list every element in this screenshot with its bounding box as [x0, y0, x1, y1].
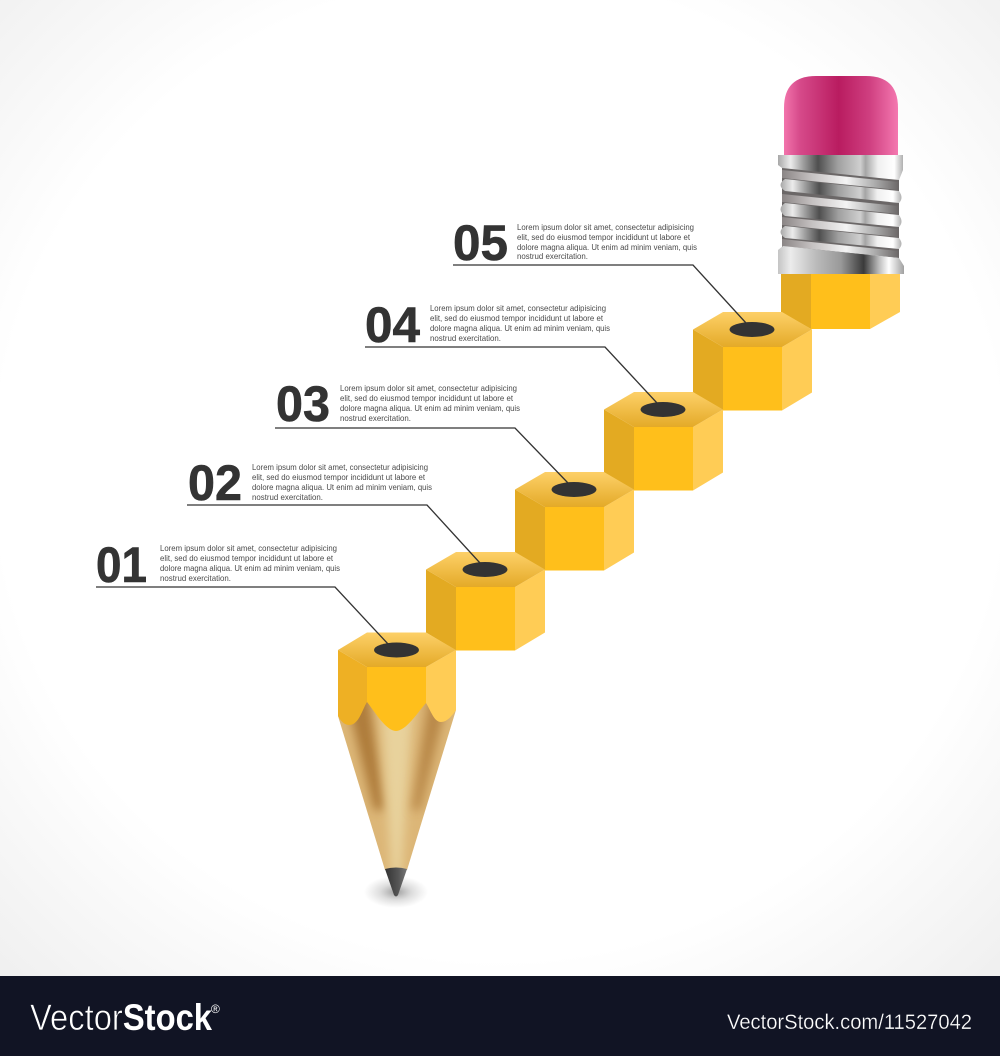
step 05 text: Lorem ipsum dolor sit amet, consectetur adipisicing: [517, 222, 694, 232]
number 03: 03: [276, 376, 330, 432]
hexagon block 2: [426, 552, 545, 650]
pink eraser: [784, 76, 898, 155]
step 01 text: dolore magna aliqua. Ut enim ad minim veniam, quis: [160, 563, 340, 573]
step 02 text: nostrud exercitation.: [252, 492, 323, 502]
step 01 text: nostrud exercitation.: [160, 573, 231, 583]
pencil eraser end: [778, 76, 904, 329]
step 03 text: nostrud exercitation.: [340, 413, 411, 423]
number 02: 02: [188, 455, 242, 511]
step 05 text: nostrud exercitation.: [517, 251, 588, 261]
step 01 callout: [96, 537, 388, 644]
leader line 03: [275, 428, 568, 483]
step 03 text: Lorem ipsum dolor sit amet, consectetur adipisicing: [340, 383, 517, 393]
leader line 02: [187, 505, 480, 563]
step 02 callout: [187, 455, 480, 563]
pencil tip: [338, 632, 456, 906]
leader line 01: [96, 587, 388, 644]
step 05 text: elit, sed do eiusmod tempor incididunt ut labore et: [517, 232, 691, 242]
step 04 text: nostrud exercitation.: [430, 333, 501, 343]
number 05: 05: [453, 215, 508, 271]
hexagon block 3: [515, 472, 634, 570]
step 04 text: dolore magna aliqua. Ut enim ad minim veniam, quis: [430, 323, 610, 333]
step 01 text: Lorem ipsum dolor sit amet, consectetur adipisicing: [160, 543, 337, 553]
step 03 text: elit, sed do eiusmod tempor incididunt ut labore et: [340, 393, 514, 403]
metal ferrule: [778, 155, 904, 274]
step 04 callout: [365, 297, 657, 403]
leader line 05: [453, 265, 746, 323]
registered mark: ®: [211, 1002, 220, 1016]
step 04 text: elit, sed do eiusmod tempor incididunt ut labore et: [430, 313, 604, 323]
step 04 text: Lorem ipsum dolor sit amet, consectetur adipisicing: [430, 303, 606, 313]
footer bar: [0, 976, 1000, 1056]
graphite lead: [385, 868, 407, 896]
step 02 text: Lorem ipsum dolor sit amet, consectetur adipisicing: [252, 462, 428, 472]
step 03 text: dolore magna aliqua. Ut enim ad minim veniam, quis: [340, 403, 520, 413]
number 01: 01: [96, 537, 147, 593]
number 04: 04: [365, 297, 420, 353]
step 02 text: elit, sed do eiusmod tempor incididunt ut labore et: [252, 472, 426, 482]
step 03 callout: [275, 376, 568, 483]
step 05 callout: [453, 215, 746, 323]
hexagon block 1 with scalloped edge: [338, 632, 456, 731]
pencil body under ferrule: [781, 272, 900, 329]
hexagon block 4: [604, 392, 723, 490]
tip shadow: [364, 876, 428, 908]
hexagon block 5: [693, 312, 812, 410]
image id: VectorStock.com/11527042: [727, 1011, 972, 1034]
brand logo: VectorStock: [30, 997, 212, 1038]
step 02 text: dolore magna aliqua. Ut enim ad minim veniam, quis: [252, 482, 432, 492]
leader line 04: [365, 347, 657, 403]
wooden cone: [338, 702, 456, 870]
step 01 text: elit, sed do eiusmod tempor incididunt ut labore et: [160, 553, 334, 563]
step 05 text: dolore magna aliqua. Ut enim ad minim veniam, quis: [517, 242, 697, 252]
